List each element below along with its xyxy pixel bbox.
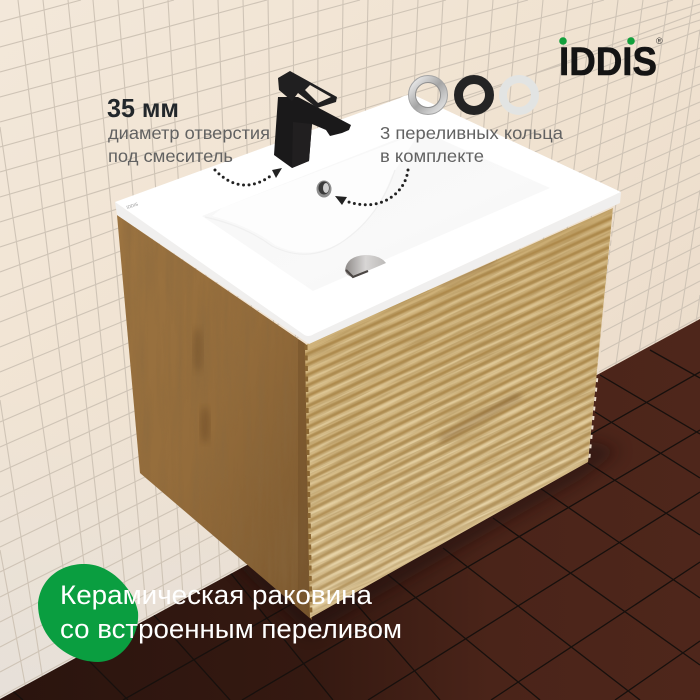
- sink front edge: [115, 192, 621, 344]
- arrow: dotted to overflow: [335, 170, 408, 205]
- text block: overflow rings: 3 переливных кольца: [380, 123, 563, 143]
- headline: [60, 580, 402, 644]
- headline: со встроенным переливом: [60, 614, 402, 644]
- sink top: [115, 95, 621, 336]
- basin inner surface: [212, 132, 420, 252]
- faucet handle: [278, 71, 337, 108]
- cabinet shadow on floor: [237, 439, 614, 630]
- arrow: dotted to faucet hole: [215, 168, 282, 185]
- text block: overflow rings: в комплекте: [380, 146, 484, 166]
- cabinet side panel: [117, 215, 312, 620]
- logo: ®: [656, 36, 663, 46]
- logo: IDDIS: [559, 40, 657, 84]
- text block: overflow rings: [380, 123, 563, 166]
- logo green dots: [559, 37, 635, 45]
- basin bowl: [202, 130, 550, 291]
- text block: hole diameter: диаметр отверстия: [108, 123, 270, 143]
- drain: [345, 255, 386, 277]
- text block: hole diameter: [107, 93, 270, 166]
- cabinet ribbed front: [304, 208, 615, 618]
- white ring: [503, 79, 535, 111]
- basin curve: [205, 170, 395, 254]
- chrome ring: [408, 76, 448, 114]
- overflow hole: [316, 180, 332, 198]
- brand mark on sink: IDDIS: [126, 201, 139, 210]
- floor tiles: [0, 319, 700, 700]
- text block: hole diameter: 35 мм: [107, 93, 179, 123]
- icon: black faucet: [274, 71, 351, 168]
- faucet body: [274, 97, 351, 168]
- cabinet: [117, 208, 615, 620]
- headline: Керамическая раковина: [60, 580, 373, 610]
- ceramic sink: [115, 95, 621, 344]
- icon: three overflow rings: [408, 76, 535, 114]
- text block: hole diameter: под смеситель: [108, 146, 233, 166]
- faucet shading: [292, 122, 312, 168]
- black ring: [458, 80, 490, 110]
- green blob: [38, 564, 138, 662]
